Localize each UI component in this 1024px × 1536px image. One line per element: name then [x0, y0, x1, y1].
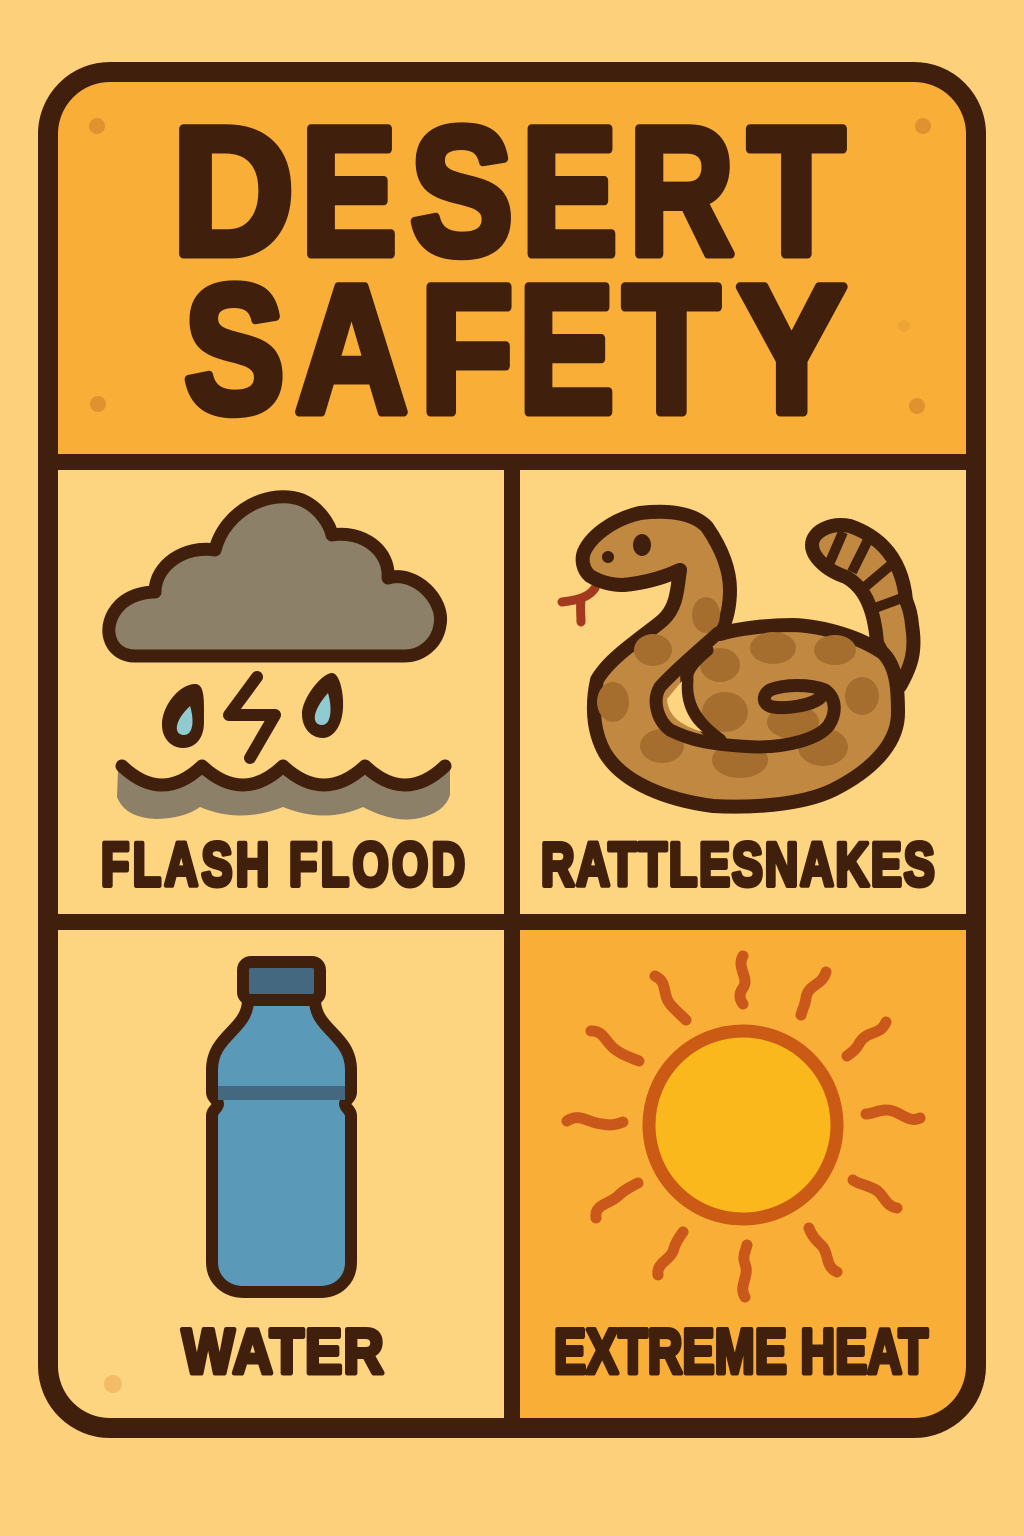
title: T [623, 249, 720, 451]
icon: storm cloud [109, 497, 441, 656]
label: flash flood: FLASH FLOOD [101, 831, 465, 899]
tail and rattle [812, 525, 914, 686]
panel: extreme heat [512, 922, 976, 1428]
title: E [301, 90, 397, 293]
title: A [295, 247, 408, 451]
label: rattlesnakes: RATTLESNAKES [541, 831, 935, 899]
title: T [748, 91, 845, 293]
title: D [172, 90, 294, 293]
icon: flood water [117, 766, 450, 820]
title: S [410, 89, 513, 293]
panel: rattlesnakes [541, 512, 935, 899]
icon: lightning bolt [229, 677, 275, 758]
title: Y [737, 247, 846, 451]
icon: sun [567, 956, 920, 1297]
white gap in coil [667, 681, 703, 732]
tongue [562, 588, 595, 622]
label: extreme heat: EXTREME HEAT [554, 1316, 928, 1387]
title [172, 89, 846, 451]
nostril [602, 551, 614, 563]
title: E [518, 248, 614, 451]
body [583, 512, 898, 807]
panel: flash flood [101, 497, 465, 899]
spots [597, 597, 879, 778]
icon: rattlesnake [562, 512, 914, 807]
label: water: WATER [182, 1316, 384, 1387]
title: S [184, 249, 285, 451]
panel: water [104, 962, 384, 1393]
panel: header [48, 72, 976, 462]
mouth [623, 570, 680, 585]
title: E [522, 90, 617, 293]
coil lines [656, 633, 834, 747]
title: F [420, 247, 513, 451]
icon: raindrops [162, 673, 343, 748]
eye [633, 534, 651, 556]
icon: water bottle [212, 962, 351, 1292]
title: R [629, 89, 734, 293]
